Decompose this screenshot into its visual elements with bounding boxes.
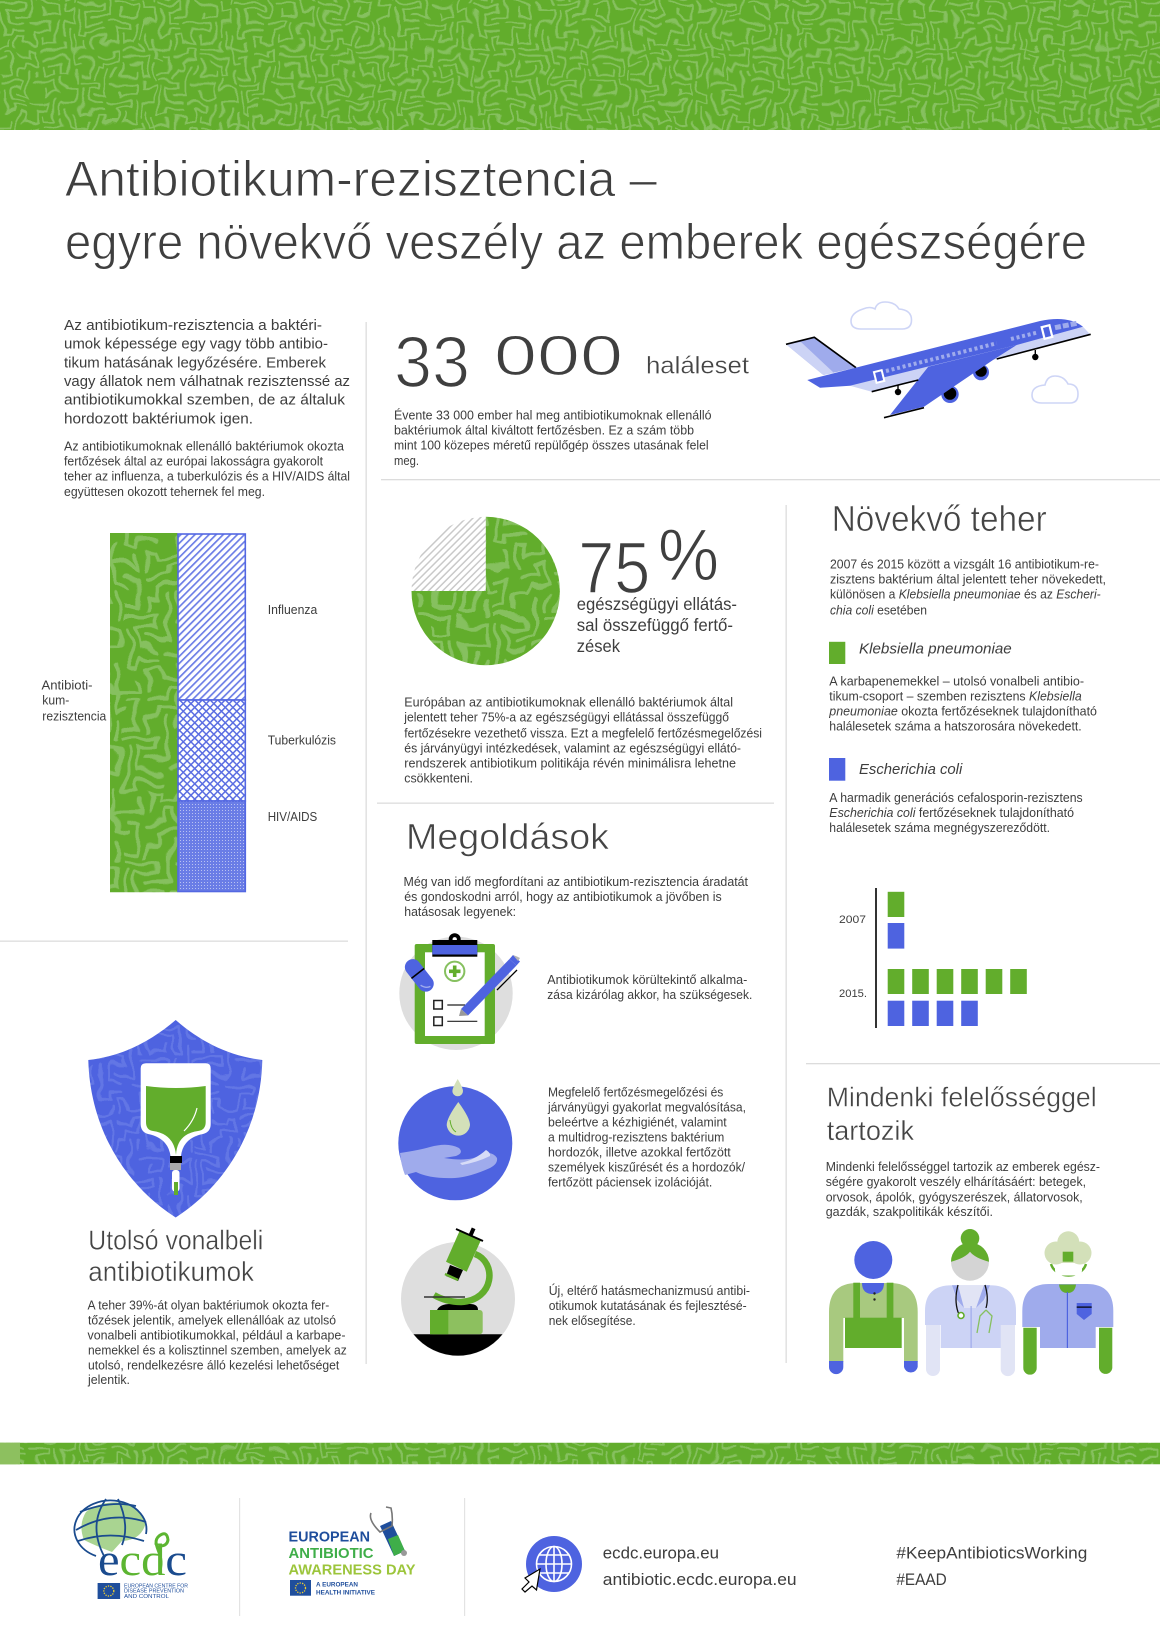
- Escherichia text: halálesetek száma megnégyszereződött.: [829, 821, 1050, 835]
- description: [394, 407, 712, 468]
- solution text: new antibiotics: nek elősegítése.: [549, 1314, 636, 1328]
- description: és járványügyi intézkedések, valamint az egészségügyi ellátó-: [404, 742, 741, 756]
- footer hashtags: [896, 1543, 1087, 1589]
- unit label: haláleset: [646, 353, 749, 380]
- stacked burden chart: [42, 533, 336, 892]
- solutions intro: hatásosak legyenek:: [404, 905, 516, 919]
- big percent: 75: [578, 528, 650, 609]
- growing burden intro: zisztens baktérium által jelentett teher növekedett,: [830, 573, 1106, 587]
- heading: solutions: Megoldások: [406, 816, 610, 857]
- Escherichia text: [829, 791, 1083, 835]
- panel: shared responsibility: [826, 1082, 1113, 1376]
- solutions intro: [404, 875, 749, 919]
- pictogram bar chart: 2015.: [839, 988, 867, 1000]
- chart labels: Influenza: [268, 603, 317, 617]
- growing burden intro: [830, 558, 1106, 617]
- big number: 000: [494, 324, 623, 388]
- icon: airplane with clouds: [786, 302, 1091, 418]
- percent caption: sal összefüggő fertő-: [577, 615, 733, 635]
- description: meg.: [394, 454, 419, 468]
- pictogram bar chart: 2007: [839, 914, 866, 926]
- footer dividers: [239, 1498, 465, 1616]
- legend: Escherichia: [829, 758, 963, 781]
- heading: last-line antibiotics: antibiotikumok: [88, 1256, 254, 1287]
- description: baktériumok által kiváltott fertőzésben. Ez a szám több: [394, 424, 694, 438]
- panel: solutions: [398, 816, 752, 1356]
- bar: HIV/AIDS: [178, 801, 245, 892]
- title: [65, 151, 1087, 270]
- logo: ECDC: EUROPEAN CENTRE FOR: [124, 1584, 188, 1590]
- panel: growing burden: [828, 498, 1106, 1028]
- pie chart: [412, 516, 560, 666]
- heading: last-line antibiotics: [88, 1224, 263, 1287]
- logo: ECDC: AND CONTROL: [124, 1594, 169, 1600]
- intro lead paragraph: [64, 318, 350, 428]
- responsibility text: [826, 1160, 1100, 1219]
- growing burden intro: 2007 és 2015 között a vizsgált 16 antibiotikum-re-: [830, 558, 1099, 572]
- Klebsiella text: [828, 675, 1097, 734]
- legend: Klebsiella: Klebsiella pneumoniae: [859, 641, 1012, 658]
- header pattern band: [0, 0, 1160, 130]
- solution text: new antibiotics: Új, eltérő hatásmechanizmusú antibi-: [549, 1283, 750, 1298]
- description: fertőzésekre vezethető vissza. Ezt a megfelelő fertőzésmegelőzési: [404, 726, 762, 740]
- heading: growing burden: Növekvő teher: [832, 498, 1047, 539]
- chart labels: HIV/AIDS: [268, 810, 317, 824]
- description: jelentett teher 75%-a az egészségügyi ellátással összefüggő: [403, 711, 729, 725]
- intro secondary paragraph: [64, 439, 350, 499]
- body text: jelentik.: [87, 1373, 130, 1387]
- body text: nemekkel és a kolisztinnel szemben, amelyek az: [88, 1343, 347, 1357]
- icon: microscope: [401, 1228, 515, 1356]
- chart labels: Antibioti-: [42, 678, 92, 692]
- Klebsiella text: A karbapenemekkel – utolsó vonalbeli antibio-: [829, 675, 1084, 689]
- body text: A teher 39%-át olyan baktériumok okozta fer-: [88, 1298, 329, 1312]
- logo: ECDC: [74, 1499, 188, 1600]
- panel: intro text: [64, 318, 350, 499]
- big number: 33: [394, 323, 470, 403]
- solution text: prudent use: Antibiotikumok körültekintő alkalma-: [547, 973, 747, 987]
- Escherichia text: A harmadik generációs cefalosporin-rezisztens: [829, 791, 1083, 805]
- Klebsiella text: halálesetek száma a hatszorosára növekedett.: [829, 720, 1082, 734]
- solution text: prudent use: zása kizárólag akkor, ha szükségesek.: [547, 988, 752, 1002]
- panel: last-line antibiotics: [87, 1224, 347, 1387]
- title: Antibiotikum-rezisztencia –: [65, 151, 657, 207]
- intro secondary paragraph: együttesen okozott tehernek fel meg.: [64, 485, 265, 499]
- growing burden intro: különösen a Klebsiella pneumoniae és az Escheri-: [830, 588, 1101, 602]
- solution text: infection prevention: a multidrog-rezisztens baktérium: [548, 1131, 724, 1145]
- responsibility text: Mindenki felelősséggel tartozik az emberek egész-: [826, 1160, 1100, 1174]
- responsibility text: ségére gyakorolt veszély elhárításáért: betegek,: [826, 1175, 1086, 1189]
- title: egyre növekvő veszély az emberek egészségére: [65, 214, 1087, 270]
- solutions intro: és gondoskodni arról, hogy az antibiotikumok a jövőben is: [404, 890, 722, 904]
- intro secondary paragraph: Az antibiotikumoknak ellenálló baktériumok okozta: [64, 439, 344, 453]
- bar: tuberculosis: [178, 700, 245, 801]
- solution text: infection prevention: fertőzött páciensek izolációját.: [548, 1176, 712, 1190]
- chart labels: rezisztencia: [42, 709, 106, 723]
- percent caption: zések: [577, 636, 620, 656]
- description: [403, 696, 762, 785]
- solution text: infection prevention: hordozók, illetve azokkal fertőzött: [548, 1146, 731, 1160]
- icon: clipboard, pill and pen: [399, 933, 520, 1050]
- footer hashtags: #EAAD: [896, 1570, 947, 1589]
- intro lead paragraph: umok képessége egy vagy több antibio-: [64, 336, 328, 352]
- body text: vonalbeli antibiotikumokkal, például a karbape-: [88, 1328, 346, 1342]
- panel: 33 000 deaths: [394, 302, 1091, 468]
- pictogram bar chart: [839, 888, 1027, 1028]
- percent caption: [577, 594, 737, 656]
- footer links: antibiotic.ecdc.europa.eu: [603, 1570, 797, 1589]
- big percent: %: [658, 515, 719, 596]
- heading: last-line antibiotics: Utolsó vonalbeli: [88, 1224, 263, 1255]
- Klebsiella text: pneumoniae okozta fertőzéseknek tulajdonítható: [828, 705, 1097, 719]
- Klebsiella text: tikum-csoport – szemben rezisztens Klebsiella: [829, 690, 1082, 704]
- icon: globe with cursor: [522, 1536, 582, 1592]
- logo: ECDC: ecdc: [98, 1534, 187, 1585]
- solution text: infection prevention: [547, 1086, 746, 1190]
- intro lead paragraph: tikum hatásának legyőzésére. Emberek: [64, 355, 327, 371]
- logo: European Antibiotic Awareness Day: AWARENESS DAY: [288, 1561, 416, 1578]
- cloud: [851, 302, 912, 329]
- Escherichia text: Escherichia coli fertőzéseknek tulajdonítható: [829, 806, 1074, 820]
- heading: shared responsibility: Mindenki felelősséggel: [827, 1082, 1097, 1113]
- solution text: infection prevention: személyek kiszűrését és a hordozók/: [548, 1161, 745, 1175]
- intro lead paragraph: Az antibiotikum-rezisztencia a baktéri-: [64, 318, 322, 334]
- bar: antibiotic resistance: [110, 533, 178, 892]
- solution text: new antibiotics: otikumok kutatásának és fejlesztésé-: [549, 1299, 747, 1313]
- intro secondary paragraph: fertőzések által az európai lakosságra gyakorolt: [64, 454, 324, 468]
- cloud: [1032, 376, 1078, 403]
- big number: [394, 323, 623, 403]
- icon: nurse with mask: [1022, 1231, 1113, 1375]
- solutions intro: Még van idő megfordítani az antibiotikum-rezisztencia áradatát: [404, 875, 749, 889]
- bar: influenza: [178, 534, 245, 700]
- body text: [87, 1298, 347, 1387]
- description: mint 100 közepes méretű repülőgép összes utasának felel: [394, 438, 709, 452]
- description: Évente 33 000 ember hal meg antibiotikumoknak ellenálló: [394, 407, 712, 422]
- solution text: prudent use: [547, 973, 752, 1002]
- legend: Escherichia: Escherichia coli: [859, 761, 963, 778]
- description: Európában az antibiotikumoknak ellenálló baktériumok által: [404, 696, 733, 710]
- solution text: new antibiotics: [549, 1283, 750, 1328]
- icon: shield with IV bag: [88, 1020, 262, 1218]
- logo: European Antibiotic Awareness Day: A EUROPEAN: [316, 1582, 358, 1588]
- footer links: [603, 1543, 797, 1589]
- chart labels: kum-: [42, 693, 69, 707]
- intro lead paragraph: hordozott baktériumok igen.: [64, 412, 253, 428]
- logo: European Antibiotic Awareness Day: [288, 1507, 416, 1596]
- panel: 75 percent: [404, 516, 762, 782]
- footer links: ecdc.europa.eu: [603, 1543, 719, 1562]
- body text: utolsó, rendelkezésre álló kezelési lehetőséget: [88, 1358, 340, 1372]
- footer hashtags: #KeepAntibioticsWorking: [896, 1543, 1087, 1562]
- icon: doctor: [925, 1229, 1016, 1376]
- description: csökkenteni.: [404, 771, 473, 785]
- growing burden intro: chia coli esetében: [830, 603, 927, 617]
- intro lead paragraph: vagy állatok nem válhatnak rezisztenssé az: [64, 374, 350, 390]
- logo: European Antibiotic Awareness Day: EUROPEAN: [288, 1529, 370, 1546]
- logo: ECDC: DISEASE PREVENTION: [124, 1589, 184, 1595]
- big percent: [578, 515, 719, 609]
- heading: shared responsibility: tartozik: [827, 1115, 914, 1146]
- icon: hand and water drop: [398, 1079, 512, 1200]
- intro secondary paragraph: teher az influenza, a tuberkulózis és a HIV/AIDS által: [64, 470, 350, 484]
- logo: European Antibiotic Awareness Day: ANTIBIOTIC: [288, 1545, 374, 1562]
- chart labels: [42, 603, 336, 824]
- column divider lines: [0, 322, 1160, 1364]
- description: rendszerek antibiotikum politikája révén minimálisra lehetne: [404, 757, 736, 771]
- body text: tőzések jelentik, amelyek ellenállóak az utolsó: [88, 1313, 336, 1327]
- chart labels: Tuberkulózis: [268, 733, 336, 747]
- footer pattern band: [0, 1442, 1160, 1464]
- responsibility text: gazdák, szakpolitikák készítői.: [826, 1205, 993, 1219]
- responsibility text: orvosok, ápolók, gyógyszerészek, állatorvosok,: [826, 1190, 1083, 1204]
- intro lead paragraph: antibiotikumokkal szemben, de az általuk: [64, 393, 346, 409]
- legend: Klebsiella: [829, 641, 1012, 664]
- icon: farmer: [829, 1241, 918, 1374]
- logo: European Antibiotic Awareness Day: HEALTH INITIATIVE: [316, 1590, 375, 1596]
- percent caption: egészségügyi ellátás-: [577, 594, 737, 614]
- solution text: infection prevention: Megfelelő fertőzésmegelőzési és: [548, 1086, 723, 1100]
- heading: shared responsibility: [827, 1082, 1097, 1146]
- solution text: infection prevention: beleértve a kézhigiénét, valamint: [548, 1116, 727, 1130]
- solution text: infection prevention: járványügyi gyakorlat megvalósítása,: [547, 1101, 746, 1115]
